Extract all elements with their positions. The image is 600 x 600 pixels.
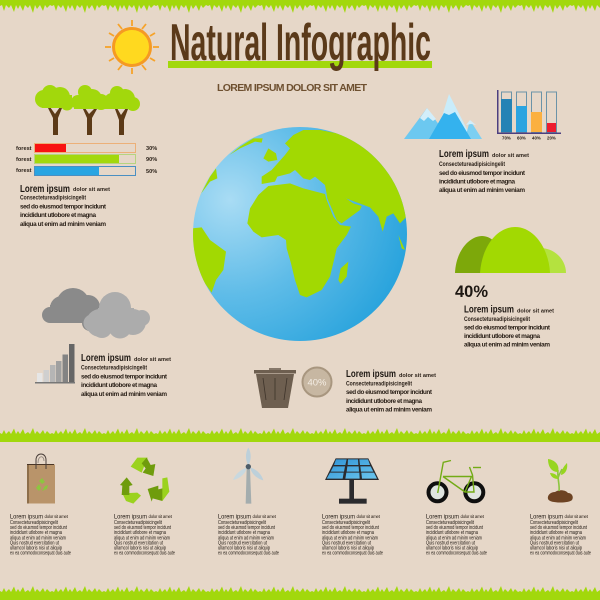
text block: clouds: sed do eiusmod tempor incidunt: [81, 374, 168, 380]
text block: clouds: dolor sit amet: [134, 357, 171, 363]
text block: clouds: aliqua ut enim ad minim veniam: [81, 391, 167, 398]
globe: [192, 127, 407, 341]
bar chart: percentages: 40%: [532, 136, 541, 140]
text block: mountains: aliqua ut enim ad minim veniam: [439, 187, 525, 194]
text block: bag: [10, 514, 71, 556]
text block: bicycle: Lorem ipsum: [426, 514, 459, 520]
text block: mountains: sed do eiusmod tempor incidunt: [439, 170, 526, 177]
bar chart: forest: 50%: [146, 169, 157, 175]
stat: 40%: 40%: [455, 283, 488, 301]
badge: 40%: [302, 368, 332, 396]
text block: turbine: ex ea commodoconsequat duis aute: [218, 550, 279, 556]
text block: bag: Consectetureadipisicingelit: [10, 520, 58, 526]
icon: solar panel: [325, 458, 379, 504]
text block: bicycle: incididunt utlobore et magna: [426, 530, 478, 536]
text block: sprout: Consectetureadipisicingelit: [530, 520, 578, 526]
text block: bag: ex ea commodoconsequat duis aute: [10, 550, 71, 556]
text block: solar: Lorem ipsum: [322, 514, 355, 520]
middle grass band: [0, 428, 600, 442]
icon: paper bag: [27, 454, 55, 504]
text block: turbine: ullamcol laboris nisi ut aliquip: [218, 546, 270, 552]
text block: turbine: dolor sit amet: [252, 514, 277, 519]
text block: bicycle: [426, 514, 487, 556]
text block: solar: Consectetureadipisicingelit: [322, 520, 370, 526]
text block: turbine: aliqua ut enim ad minim veniam: [218, 536, 274, 542]
text block: recycle: dolor sit amet: [148, 514, 173, 519]
text block: hills: dolor sit amet: [517, 308, 554, 314]
text block: mountains: dolor sit amet: [492, 153, 529, 159]
bar chart: forest: forest: [16, 157, 32, 163]
text block: sprout: ullamcol laboris nisi ut aliquip: [530, 546, 582, 552]
subtitle: LOREM IPSUM DOLOR SIT AMET: [217, 82, 368, 94]
text block: turbine: incididunt utlobore et magna: [218, 530, 270, 536]
text block: bag: dolor sit amet: [44, 514, 69, 519]
text block: turbine: Quis nostrud exercitation ut: [218, 540, 267, 546]
text block: bicycle: ullamcol laboris nisi ut aliquip: [426, 546, 478, 552]
bar chart: percentages: 70%: [502, 136, 511, 140]
bar chart: forest: 90%: [146, 157, 157, 163]
text block: hills: sed do eiusmod tempor incidunt: [464, 324, 551, 332]
icon: sun: [105, 20, 159, 74]
text block: trash: aliqua ut enim ad minim veniam: [346, 406, 432, 414]
text block: bag: Lorem ipsum: [10, 514, 43, 520]
text block: trash: sed do eiusmod tempor incidunt: [346, 389, 433, 396]
text block: forest: Lorem ipsum: [20, 183, 70, 195]
text block: recycle: ullamcol laboris nisi ut aliquip: [114, 546, 166, 552]
text block: forest: Consectetureadipisicingelit: [20, 194, 87, 202]
text block: bicycle: Quis nostrud exercitation ut: [426, 540, 475, 546]
text block: trash: [346, 368, 436, 414]
text block: clouds: [81, 352, 171, 398]
icon: trash can: [254, 368, 296, 408]
text block: mountains: [439, 148, 529, 194]
text block: turbine: [218, 514, 279, 556]
text block: solar: aliqua ut enim ad minim veniam: [322, 536, 378, 542]
icon: grey clouds: [42, 288, 150, 338]
icon: recycle arrows: [120, 458, 169, 504]
text block: bicycle: dolor sit amet: [460, 514, 485, 519]
text block: recycle: Consectetureadipisicingelit: [114, 520, 162, 526]
text block: recycle: Quis nostrud exercitation ut: [114, 540, 163, 546]
text block: turbine: Consectetureadipisicingelit: [218, 520, 266, 526]
text block: solar: dolor sit amet: [356, 514, 381, 519]
icon: sprout: [548, 459, 573, 502]
bar chart: forest: forest: [16, 146, 32, 152]
text block: bag: sed do eiusmod tempor incidunt: [10, 525, 67, 531]
text block: hills: Consectetureadipisicingelit: [464, 316, 531, 323]
icon: green hills: [455, 227, 566, 273]
top grass border: [0, 0, 600, 13]
text block: bicycle: sed do eiusmod tempor incidunt: [426, 525, 483, 531]
text block: bag: aliqua ut enim ad minim veniam: [10, 536, 66, 542]
text block: forest: sed do eiusmod tempor incidunt: [20, 204, 107, 210]
text block: turbine: Lorem ipsum: [218, 514, 251, 520]
text block: forest: incididunt utlobore et magna: [20, 212, 96, 219]
text block: clouds: Consectetureadipisicingelit: [81, 364, 148, 372]
text block: recycle: sed do eiusmod tempor incidunt: [114, 525, 171, 531]
text block: recycle: [114, 514, 175, 556]
text block: solar: ullamcol laboris nisi ut aliquip: [322, 546, 374, 552]
text block: hills: incididunt utlobore et magna: [464, 333, 540, 340]
text block: solar: [322, 514, 383, 556]
bar chart: forest: 30%: [146, 146, 157, 152]
text block: sprout: Quis nostrud exercitation ut: [530, 540, 579, 546]
icon: trees: [35, 85, 140, 135]
icon: mountains: [404, 94, 482, 139]
text block: bicycle: ex ea commodoconsequat duis aute: [426, 550, 487, 556]
text block: solar: incididunt utlobore et magna: [322, 530, 374, 536]
text block: bag: Quis nostrud exercitation ut: [10, 540, 59, 546]
text block: clouds: incididunt utlobore et magna: [81, 382, 157, 389]
text block: bicycle: Consectetureadipisicingelit: [426, 520, 474, 526]
text block: trash: Consectetureadipisicingelit: [346, 380, 413, 388]
text block: trash: incididunt utlobore et magna: [346, 398, 422, 405]
text block: recycle: aliqua ut enim ad minim veniam: [114, 536, 170, 542]
text block: sprout: incididunt utlobore et magna: [530, 530, 582, 536]
text block: solar: sed do eiusmod tempor incidunt: [322, 525, 379, 531]
text block: clouds: Lorem ipsum: [81, 352, 131, 364]
icon: bicycle: [428, 460, 483, 501]
bar chart: percentages: [497, 90, 561, 140]
text block: sprout: Lorem ipsum: [530, 514, 563, 520]
bottom grass band: [0, 586, 600, 600]
bar chart: percentages: 60%: [517, 136, 526, 140]
text block: recycle: ex ea commodoconsequat duis aute: [114, 550, 175, 556]
text block: turbine: sed do eiusmod tempor incidunt: [218, 525, 275, 531]
text block: mountains: Lorem ipsum: [439, 148, 489, 160]
text block: solar: Quis nostrud exercitation ut: [322, 540, 371, 546]
badge: 40%: 40%: [307, 378, 327, 388]
text block: sprout: dolor sit amet: [564, 514, 589, 519]
bar chart: forest: forest: [16, 168, 32, 174]
text block: mountains: incididunt utlobore et magna: [439, 178, 515, 186]
text block: bag: ullamcol laboris nisi ut aliquip: [10, 546, 62, 552]
text block: sprout: [530, 514, 591, 556]
text block: forest: [20, 183, 110, 228]
text block: hills: Lorem ipsum: [464, 304, 514, 316]
text block: mountains: Consectetureadipisicingelit: [439, 161, 506, 168]
bar chart: forest: [16, 144, 157, 176]
icon: grey bar chart: [35, 344, 75, 384]
text block: trash: Lorem ipsum: [346, 368, 396, 380]
text block: hills: [464, 304, 554, 348]
bar chart: percentages: 20%: [547, 136, 556, 140]
text block: recycle: Lorem ipsum: [114, 514, 147, 520]
text block: solar: ex ea commodoconsequat duis aute: [322, 550, 383, 556]
text block: forest: aliqua ut enim ad minim veniam: [20, 221, 106, 228]
text block: recycle: incididunt utlobore et magna: [114, 530, 166, 536]
text block: forest: dolor sit amet: [73, 187, 110, 193]
title: [168, 14, 432, 72]
text block: trash: dolor sit amet: [399, 373, 436, 379]
text block: bicycle: aliqua ut enim ad minim veniam: [426, 536, 482, 542]
text block: hills: aliqua ut enim ad minim veniam: [464, 342, 550, 348]
icon: wind turbine: [233, 448, 263, 504]
text block: bag: incididunt utlobore et magna: [10, 530, 62, 536]
